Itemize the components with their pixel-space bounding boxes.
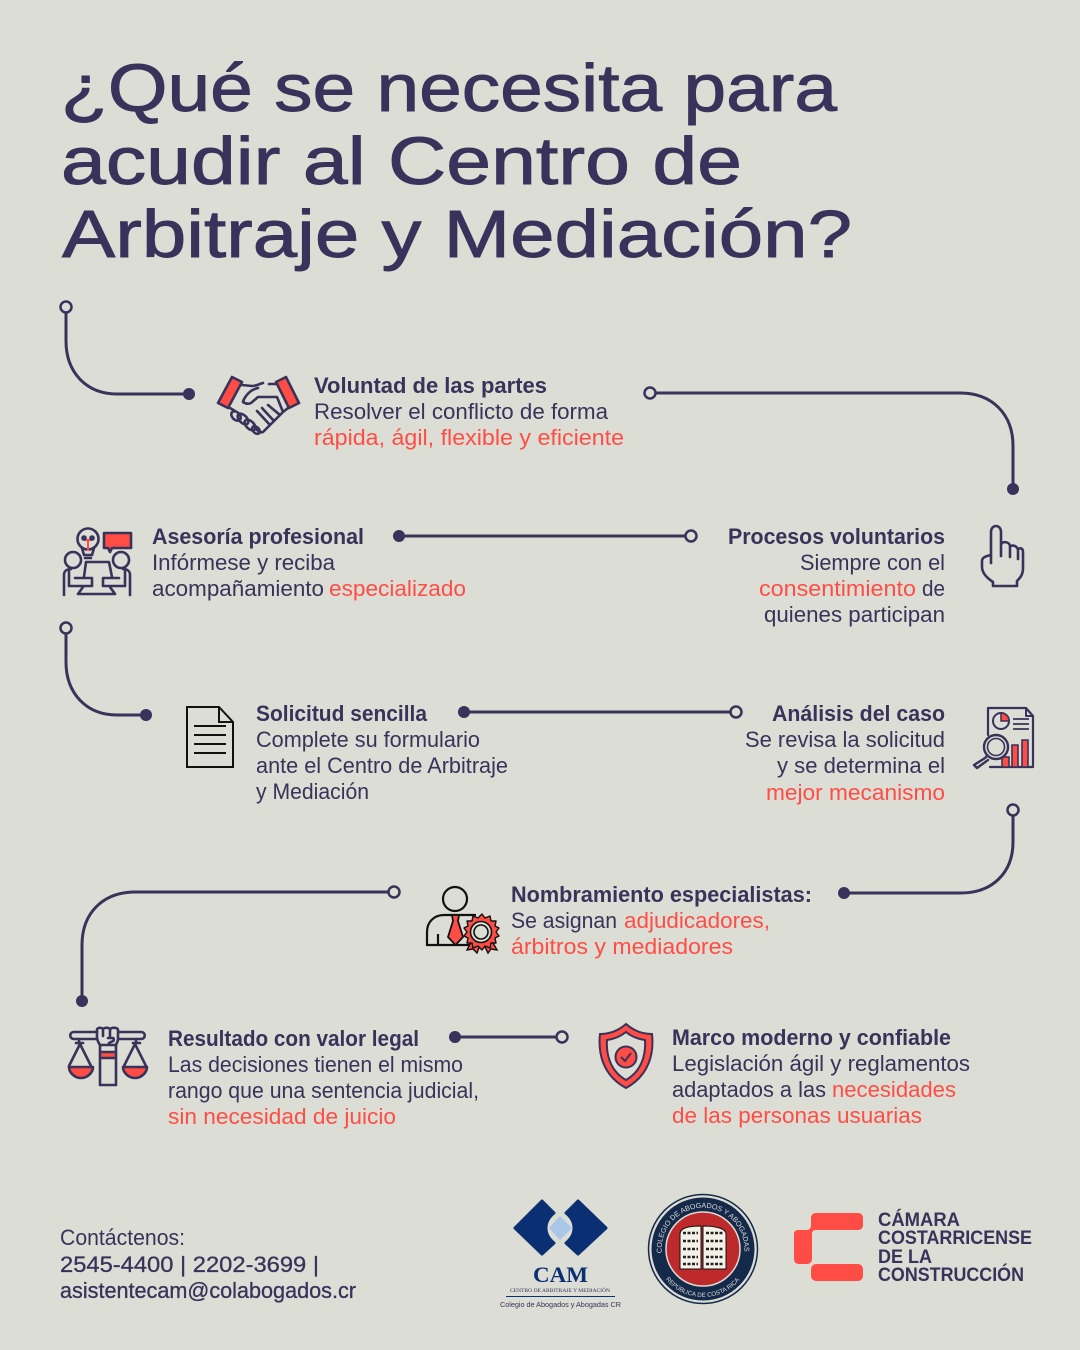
- text: Nombramiento especialistas: Se asignan: [511, 908, 617, 933]
- text: Procesos voluntarios: de: [922, 576, 945, 601]
- text: Procesos voluntarios: Siempre con el: [800, 550, 945, 575]
- text: Procesos voluntarios: Procesos voluntarios: [728, 524, 945, 549]
- icon: case analysis report: [974, 708, 1033, 768]
- text: Asesoría profesional: acompañamiento: [152, 576, 324, 601]
- text: Procesos voluntarios: consentimiento: [759, 576, 916, 601]
- connector: Solicitud to Análisis: [458, 706, 742, 718]
- text: Nombramiento especialistas: [511, 882, 812, 959]
- icon: specialist with award: [427, 887, 499, 953]
- text: Resultado con valor legal: Las decisiones tienen el mismo: [168, 1052, 463, 1077]
- icon: scales with fist: [69, 1028, 147, 1085]
- text: Asesoría profesional: especializado: [329, 576, 466, 601]
- text: Resultado con valor legal: sin necesidad de juicio: [168, 1104, 396, 1129]
- connector: start to Voluntad de las partes: [60, 302, 195, 400]
- text: Asesoría profesional: [152, 524, 466, 601]
- connector: Procesos voluntarios to Asesoría: [393, 530, 696, 542]
- text: Procesos voluntarios: [728, 524, 945, 627]
- icon: document: [187, 707, 233, 767]
- text: Nombramiento especialistas: Nombramiento especialistas:: [511, 882, 812, 907]
- logo: Cámara Costarricense de la Construcción: CONSTRUCCIÓN: [878, 1264, 1024, 1286]
- text: Procesos voluntarios: quienes participan: [764, 602, 945, 627]
- title: Arbitraje y Mediación?: [62, 197, 852, 272]
- logo: Cámara Costarricense de la Construcción: COSTARRICENSE: [878, 1228, 1032, 1249]
- text: Asesoría profesional: Infórmese y reciba: [152, 550, 336, 575]
- connector: Análisis to Nombramiento: [838, 804, 1018, 899]
- logo: CAM: [500, 1201, 622, 1309]
- text: Resultado con valor legal: rango que una sentencia judicial,: [168, 1078, 479, 1103]
- text: Voluntad de las partes: Resolver el conflicto de forma: [314, 399, 609, 424]
- text: Marco moderno y confiable: Marco moderno y confiable: [672, 1025, 951, 1050]
- logo: Cámara Costarricense de la Construcción: [794, 1209, 1032, 1286]
- text: Asesoría profesional: Asesoría profesional: [152, 524, 364, 549]
- text: Marco moderno y confiable: adaptados a las: [672, 1077, 826, 1102]
- text: Análisis del caso: [745, 701, 945, 805]
- title: [61, 51, 852, 272]
- contact information: Contáctenos:: [60, 1225, 185, 1250]
- contact information: 2545-4400 | 2202-3699 |: [60, 1252, 319, 1277]
- icon: shield: [600, 1024, 652, 1088]
- text: Análisis del caso: Análisis del caso: [772, 701, 945, 726]
- logo: Cámara Costarricense de la Construcción: CÁMARA: [878, 1209, 960, 1231]
- logo: Cámara Costarricense de la Construcción: DE LA: [878, 1247, 932, 1268]
- logo: CAM: CENTRO DE ARBITRAJE Y MEDIACIÓN: [510, 1286, 610, 1294]
- text: Voluntad de las partes: Voluntad de las partes: [314, 373, 547, 398]
- text: Análisis del caso: mejor mecanismo: [766, 780, 945, 805]
- icon: advisory meeting: [64, 528, 131, 595]
- text: Nombramiento especialistas: árbitros y mediadores: [511, 934, 733, 959]
- text: Solicitud sencilla: ante el Centro de Arbitraje: [256, 753, 508, 778]
- connector: Asesoría to Solicitud: [60, 622, 152, 721]
- text: Marco moderno y confiable: Legislación ágil y reglamentos: [672, 1051, 970, 1076]
- text: Resultado con valor legal: [168, 1026, 479, 1129]
- connector: Nombramiento to Resultado: [76, 886, 400, 1007]
- text: Análisis del caso: y se determina el: [777, 753, 945, 778]
- text: Marco moderno y confiable: [672, 1025, 970, 1128]
- text: Análisis del caso: Se revisa la solicitud: [745, 727, 945, 752]
- text: Resultado con valor legal: Resultado con valor legal: [168, 1026, 419, 1051]
- text: Solicitud sencilla: Complete su formulario: [256, 727, 480, 752]
- text: Voluntad de las partes: [314, 373, 624, 450]
- text: Solicitud sencilla: [256, 701, 508, 804]
- connector: Voluntad to Procesos voluntarios: [644, 388, 1019, 495]
- text: Marco moderno y confiable: de las personas usuarias: [672, 1103, 922, 1128]
- icon: handshake: [218, 377, 299, 435]
- connector: Resultado to Marco: [449, 1031, 568, 1043]
- title: acudir al Centro de: [61, 124, 742, 199]
- logo: Colegio de Abogados seal: [648, 1194, 758, 1304]
- logo: Colegio de Abogados seal: REPÚBLICA DE COSTA RICA: [666, 1276, 740, 1297]
- text: Marco moderno y confiable: necesidades: [832, 1077, 956, 1102]
- text: Voluntad de las partes: rápida, ágil, flexible y eficiente: [314, 425, 624, 450]
- title: ¿Qué se necesita para: [61, 51, 838, 126]
- text: Solicitud sencilla: y Mediación: [256, 779, 369, 804]
- logo: CAM: CAM: [533, 1262, 588, 1287]
- logo: Colegio de Abogados seal: COLEGIO DE ABOGADOS Y ABOGADAS: [656, 1202, 750, 1253]
- logo: CAM: Colegio de Abogados y Abogadas CR: [500, 1300, 622, 1309]
- text: Solicitud sencilla: Solicitud sencilla: [256, 701, 428, 726]
- icon: pointing hand: [982, 526, 1023, 586]
- text: Nombramiento especialistas: adjudicadores,: [624, 908, 770, 933]
- contact information: asistentecam@colabogados.cr: [60, 1278, 356, 1303]
- contact information: [60, 1225, 356, 1303]
